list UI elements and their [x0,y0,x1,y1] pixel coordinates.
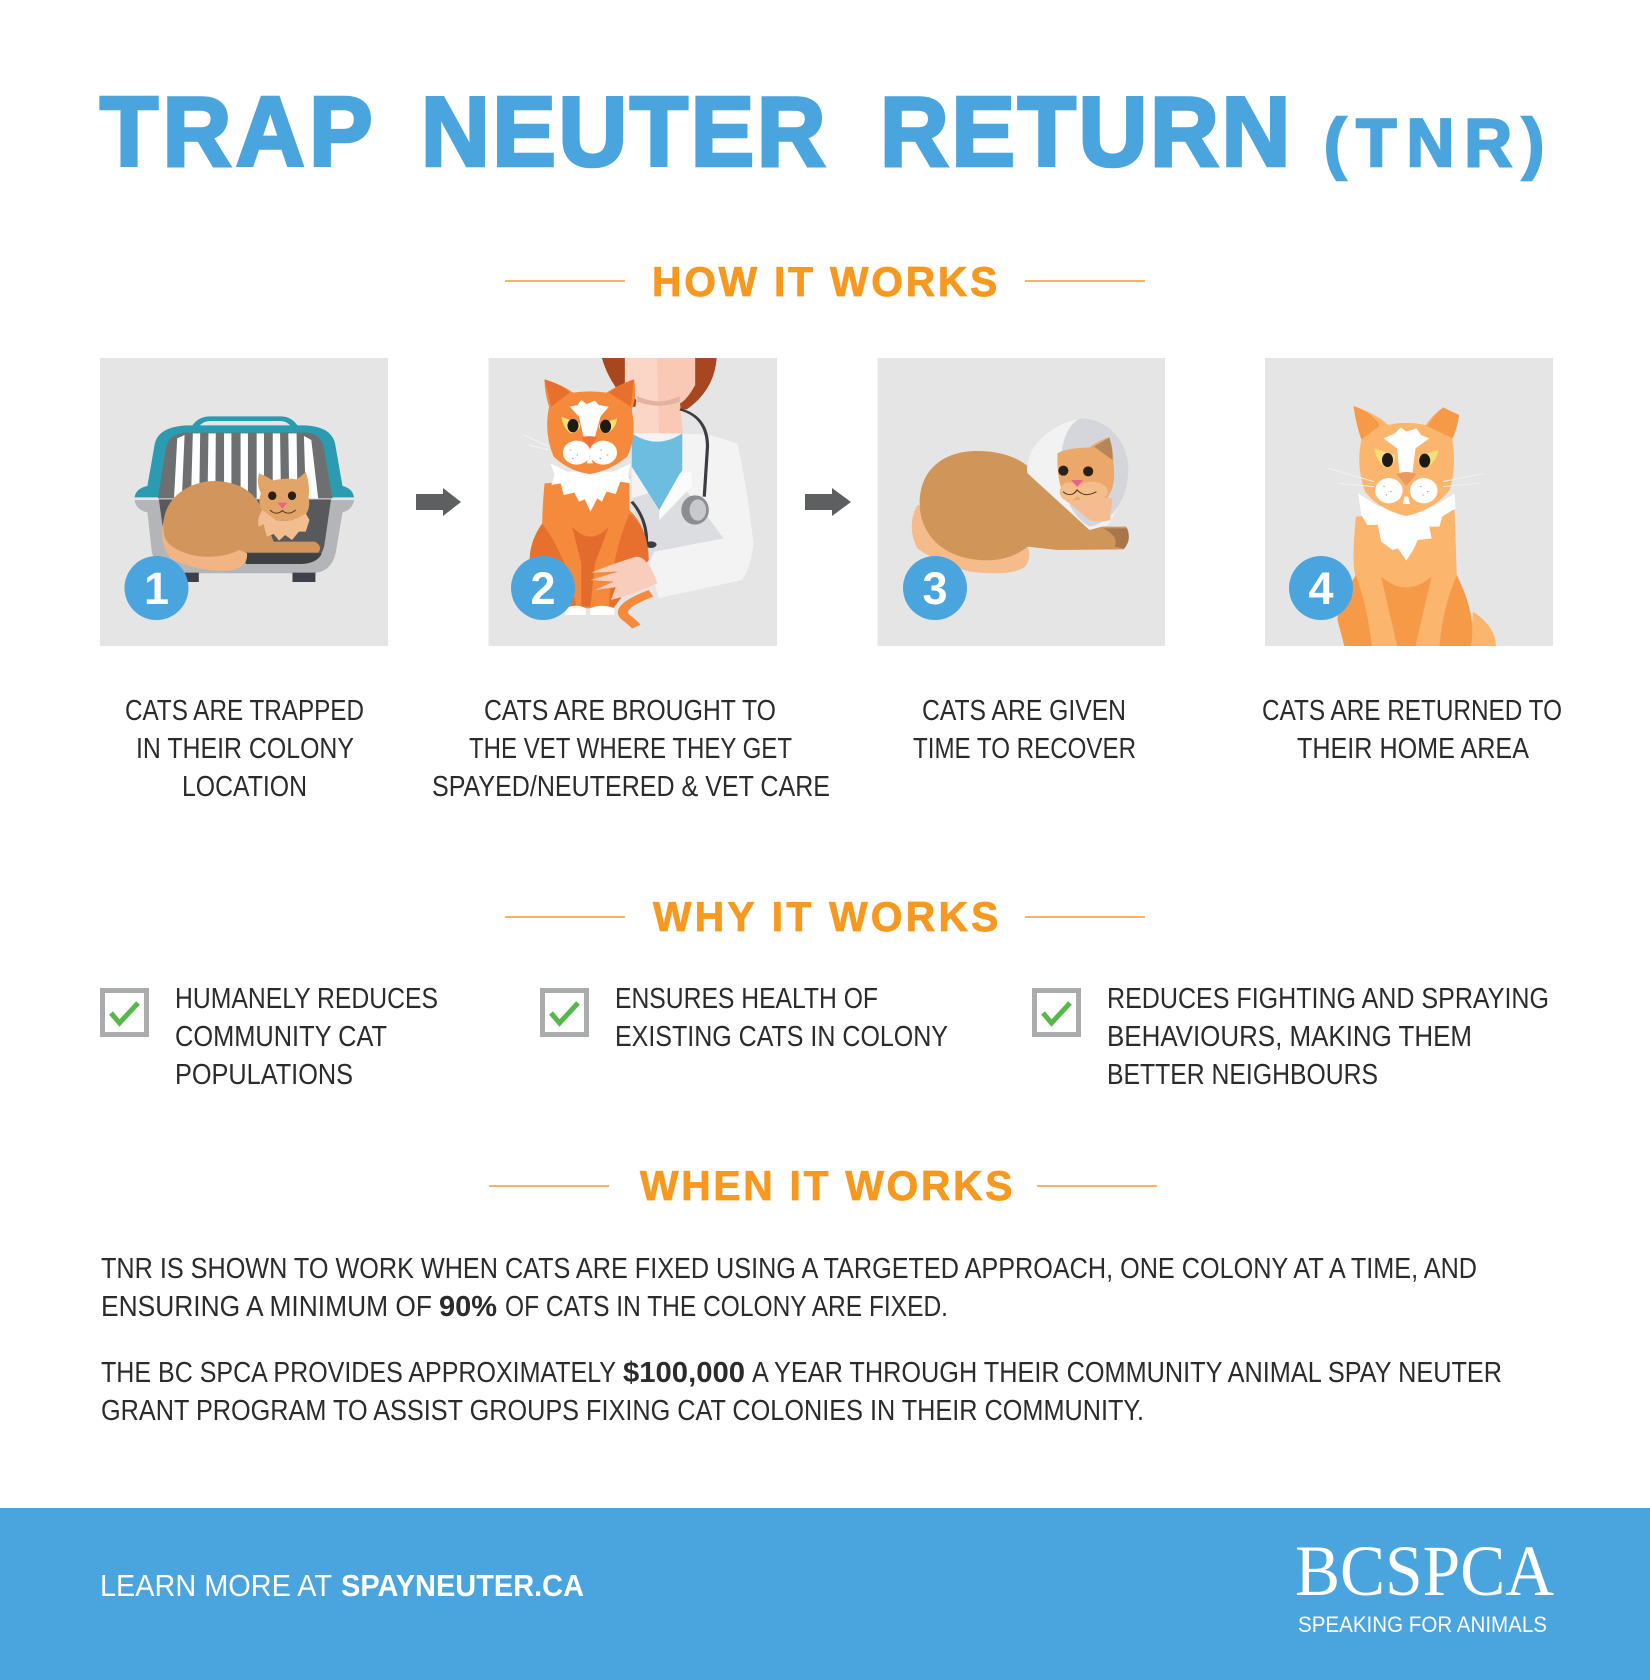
caption: step 1: IN THEIR COLONY [136,733,354,765]
benefit: reduces fighting: BETTER NEIGHBOURS [1107,1059,1378,1091]
icon: checkbox 3 [1034,990,1078,1034]
benefit: ensures health [542,983,948,1053]
title [100,78,1544,187]
caption: step 2 [432,695,830,803]
logo: BCSPCA: BCSPCA [1295,1531,1554,1611]
panel: step 3 cat with cone [878,358,1165,646]
icon: protective cone with cat head [1027,418,1128,530]
text block: grant program: THE BC SPCA PROVIDES APPROXIMATELY [101,1357,616,1389]
text block: grant program [101,1357,1502,1427]
caption: step 2: SPAYED/NEUTERED & VET CARE [432,771,830,803]
caption: step 3: CATS ARE GIVEN [922,695,1126,727]
icon: curled cat [162,472,320,571]
footer band [0,1508,1650,1680]
footer call to action: SPAYNEUTER.CA [341,1568,584,1603]
icon: cat carrier [135,419,354,582]
number badge 2 [511,556,575,620]
heading: when it works: WHEN IT WORKS [640,1162,1012,1209]
title: (TNR) [1324,105,1544,181]
logo: BCSPCA: SPEAKING FOR ANIMALS [1298,1612,1547,1637]
caption: step 2: CATS ARE BROUGHT TO [484,695,776,727]
arrow: step 1 to 2 [416,488,461,516]
text block: targeted approach: OF CATS IN THE COLONY ARE FIXED. [505,1291,948,1323]
caption: step 3 [913,695,1136,765]
footer call to action: LEARN MORE AT [100,1568,332,1603]
caption: step 4: CATS ARE RETURNED TO [1262,695,1562,727]
text block: targeted approach [101,1253,1477,1323]
heading: how it works: HOW IT WORKS [652,258,997,305]
benefit: reduces populations: COMMUNITY CAT [175,1021,387,1053]
panel: step 2 vet with cat [488,358,777,646]
caption: step 4 [1262,695,1562,765]
benefit: reduces fighting: BEHAVIOURS, MAKING THEM [1107,1021,1472,1053]
number badge 3: 3 [922,563,948,614]
text block: targeted approach: 90% [439,1291,497,1323]
icon: sitting cat [1328,406,1496,646]
benefit: reduces populations: HUMANELY REDUCES [175,983,438,1015]
title: NEUTER [421,78,825,187]
number badge 4: 4 [1308,563,1334,614]
caption: step 2: THE VET WHERE THEY GET [469,733,792,765]
benefit: ensures health: ENSURES HEALTH OF [615,983,878,1015]
caption: step 4: THEIR HOME AREA [1297,733,1530,765]
benefit: reduces populations: POPULATIONS [175,1059,353,1091]
number badge 1: 1 [144,563,169,614]
footer call to action [100,1568,584,1603]
icon: checkbox 1 [102,990,146,1034]
benefit: ensures health: EXISTING CATS IN COLONY [615,1021,948,1053]
text block: targeted approach: TNR IS SHOWN TO WORK WHEN CATS ARE FIXED USING A TARGETED APPROACH, ONE COLONY AT A TIME, AND [101,1253,1477,1285]
icon: checkbox 2 [542,990,586,1034]
arrow: step 2 to 3 [805,488,851,516]
icon: vet hand [590,557,657,600]
text block: grant program: GRANT PROGRAM TO ASSIST GROUPS FIXING CAT COLONIES IN THEIR COMMUNITY. [101,1395,1144,1427]
number badge 3 [903,556,967,620]
number badge 2: 2 [530,563,556,614]
benefit: reduces fighting [1034,983,1549,1091]
text block: targeted approach: ENSURING A MINIMUM OF [101,1291,432,1323]
number badge 4 [1289,556,1353,620]
caption: step 1: LOCATION [182,771,307,803]
caption: step 1 [125,695,364,803]
icon: orange cat [524,379,651,627]
number badge 1 [124,556,188,620]
benefit: reduces populations [102,983,438,1091]
title: TRAP [100,78,373,187]
icon: resting cat body [912,451,1129,573]
heading: why it works: WHY IT WORKS [653,893,998,940]
icon: veterinarian [602,358,753,598]
panel: step 1 cat in carrier [100,358,388,646]
text block: grant program: A YEAR THROUGH THEIR COMMUNITY ANIMAL SPAY NEUTER [752,1357,1502,1389]
benefit: reduces fighting: REDUCES FIGHTING AND SPRAYING [1107,983,1549,1015]
title: RETURN [880,78,1290,187]
caption: step 1: CATS ARE TRAPPED [125,695,364,727]
caption: step 3: TIME TO RECOVER [913,733,1136,765]
text block: grant program: $100,000 [623,1357,745,1389]
panel: step 4 returned cat [1265,358,1553,646]
